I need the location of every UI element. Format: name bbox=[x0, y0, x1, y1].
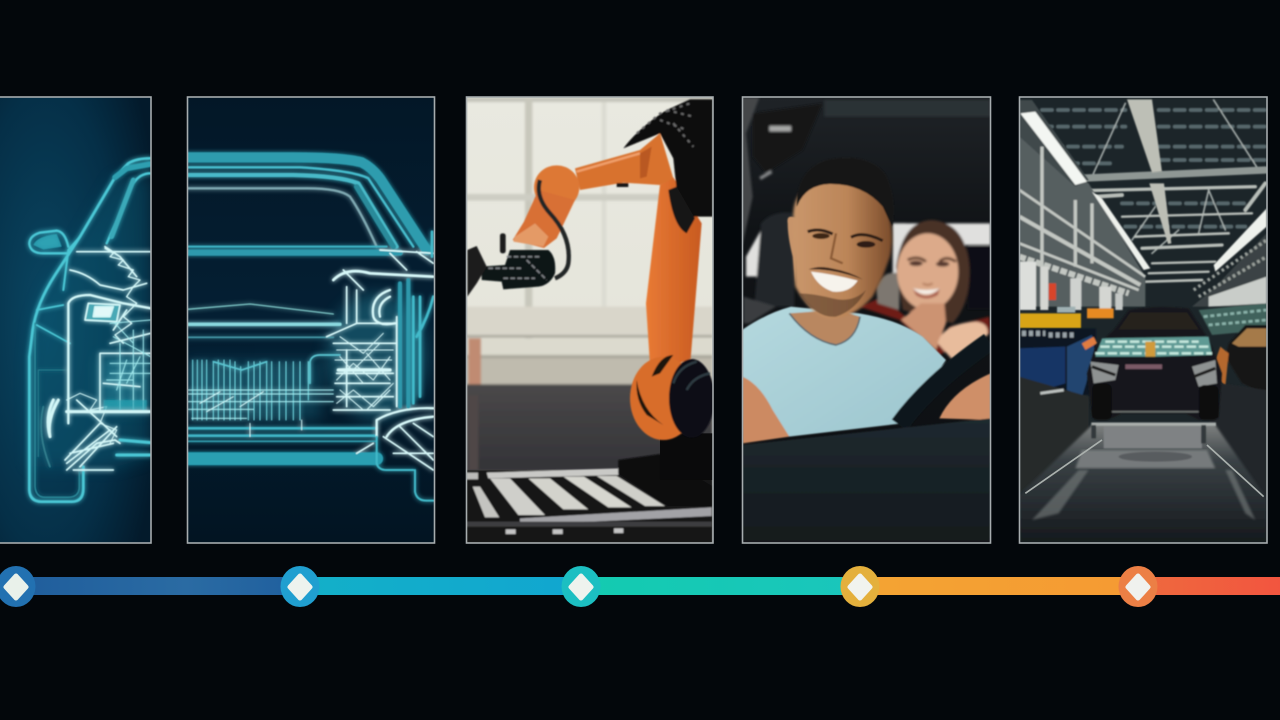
icon: body cross bands bbox=[187, 247, 400, 459]
passenger bbox=[859, 297, 991, 357]
milestone node 4 bbox=[840, 566, 880, 607]
icon: battery pack bbox=[187, 355, 340, 437]
ceiling trusses bbox=[1042, 100, 1267, 282]
icon: engine and wheel detail bbox=[327, 250, 435, 470]
rear windows bbox=[893, 223, 991, 245]
dashboard bbox=[742, 418, 991, 543]
milestone node 1 bbox=[0, 566, 36, 607]
milestone node 5 bbox=[1118, 566, 1158, 607]
driver shirt bbox=[742, 307, 946, 437]
right factory wall bbox=[1192, 197, 1267, 395]
timeline segment: blue bbox=[15, 577, 300, 595]
robot arm bbox=[467, 99, 714, 440]
icon: headlight and engine detail bbox=[48, 247, 151, 470]
icon: roof and windshield bbox=[187, 157, 427, 250]
timeline segment: teal bbox=[581, 577, 860, 595]
engine glow bbox=[327, 293, 427, 420]
panel: wireframe car, left half bbox=[0, 97, 151, 543]
pedestal bbox=[660, 433, 713, 480]
icon: car body outline bbox=[29, 158, 151, 502]
panel: smiling driver and passenger bbox=[742, 97, 991, 543]
driver head bbox=[787, 217, 797, 287]
timeline bbox=[0, 566, 1280, 607]
panel: car factory line bbox=[1019, 97, 1267, 543]
interior roof and pillar bbox=[824, 100, 991, 117]
tool head bbox=[482, 250, 555, 289]
black cable housing bbox=[623, 99, 713, 217]
milestone node 2 bbox=[280, 566, 320, 607]
driver arms bbox=[742, 377, 789, 443]
car body glow bbox=[29, 177, 151, 467]
left factory wall bbox=[1019, 100, 1150, 328]
panel: orange robot arm bbox=[466, 97, 714, 543]
driver seat bbox=[754, 213, 794, 307]
mirror fill bbox=[33, 234, 62, 249]
steering wheel bbox=[899, 342, 989, 425]
central beam bbox=[1127, 99, 1162, 173]
infographic canvas bbox=[0, 96, 1280, 607]
timeline segment: light blue bbox=[300, 577, 581, 595]
panel: wireframe car, right half bbox=[187, 97, 435, 543]
timeline segment: orange bbox=[860, 577, 1138, 595]
panel frames bbox=[0, 97, 1267, 543]
milestone node 3 bbox=[562, 566, 600, 607]
conveyor bbox=[466, 454, 713, 543]
timeline segment: red bbox=[1138, 577, 1280, 595]
floor bbox=[1019, 425, 1267, 543]
rear vehicle rows bbox=[1019, 307, 1096, 493]
window panes bbox=[466, 97, 713, 471]
icon: front vehicle bbox=[1087, 307, 1222, 443]
